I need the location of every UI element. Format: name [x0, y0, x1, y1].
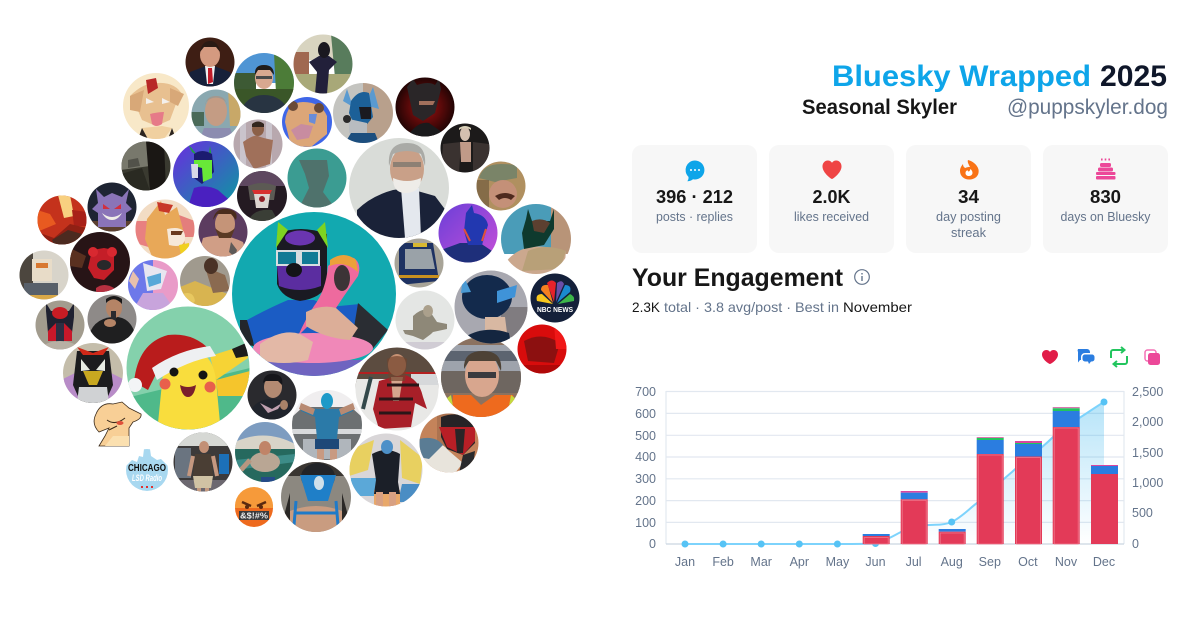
month labels: Sep: [979, 555, 1001, 569]
avatar: man in leather jacket with phone: [87, 294, 137, 344]
month labels: Mar: [750, 555, 772, 569]
left axis labels: [635, 385, 656, 551]
avatar: bearded shirtless man: [198, 207, 248, 257]
avatar: older man in dark suit: [349, 138, 449, 238]
avatar: woman in fur coat: [440, 123, 490, 173]
heading: Your Engagement: Your Engagement: [632, 264, 844, 292]
avatar: man at street fair: [173, 432, 233, 492]
chart legend: [1042, 347, 1160, 367]
avatar: angry swearing emoji: &$!#%: [240, 510, 268, 520]
avatar: Chicago LSD Radio logo: [126, 449, 168, 491]
engagement summary: November: [843, 299, 912, 315]
avatar: blue transit bus: [394, 238, 444, 288]
title: Bluesky Wrapped: [832, 60, 1091, 93]
avatar: red blurred abstract: [517, 324, 567, 374]
engagement summary: 2.3K: [632, 299, 661, 315]
stat label: likes received: [794, 210, 869, 224]
line data points: [682, 398, 1108, 548]
handle: @puppskyler.dog: [1007, 96, 1168, 119]
avatar: penguin-like furry suit: [63, 343, 123, 403]
avatar: white fox mask on pink and purple: [128, 260, 178, 310]
avatar: red and black pup hood: [35, 300, 85, 350]
left axis labels: 200: [635, 494, 656, 508]
avatar: man in suit with red tie: [185, 37, 235, 87]
avatar: cartoon bloody dog: [123, 73, 189, 139]
left axis labels: 500: [635, 429, 656, 443]
month labels: Aug: [941, 555, 963, 569]
panel: posts and replies: [632, 145, 757, 253]
bar: July: [901, 491, 928, 544]
avatar: black mask on red: [395, 77, 455, 137]
avatar: monkey on white: [395, 290, 455, 350]
left axis labels: 100: [635, 516, 656, 530]
engagement summary: total · 3.8 avg/post · Best in: [664, 299, 839, 315]
avatar: gray pup with red mask at festival: [237, 171, 287, 221]
avatar: NBC News logo: NBC NEWS: [537, 307, 573, 314]
icon: flame: [960, 160, 979, 180]
icon: birthday cake: [1096, 158, 1116, 180]
avatar: man with inflatable: [180, 256, 230, 306]
icon: quotes legend: [1145, 350, 1160, 365]
avatar: neon green and blue pup: [173, 141, 239, 207]
avatar: man with gray hair: [191, 89, 241, 139]
chart: monthly engagement: [635, 385, 1163, 569]
right axis labels: 2,000: [1132, 415, 1163, 429]
avatar: blue and black fursuit: [333, 83, 393, 143]
right axis labels: 0: [1132, 537, 1139, 551]
month labels: Jan: [675, 555, 695, 569]
cumulative area: [685, 402, 1104, 544]
avatar: angry swearing emoji: [235, 487, 273, 527]
avatar: Chicago LSD Radio logo: CHICAGO: [128, 463, 166, 474]
panel: days on Bluesky: [1043, 145, 1168, 253]
avatar: man with glasses by train: [441, 337, 521, 417]
bar: August: [939, 529, 966, 544]
avatar: blue rubber pup mask: [454, 270, 528, 344]
avatar: swimmer in lake: [235, 422, 295, 482]
avatar: cartoon tan dog doodle: [94, 402, 141, 446]
icon: replies legend: [1078, 349, 1094, 364]
bar: December: [1091, 465, 1118, 544]
avatar: man against colorful mural: [349, 433, 423, 507]
avatar: dark figure statue in garden: [293, 34, 353, 94]
right axis labels: 1,500: [1132, 446, 1163, 460]
month labels: Feb: [712, 555, 734, 569]
avatar: Chicago LSD Radio logo: LSD Radio: [132, 473, 162, 483]
avatar: blurred teal figure: [287, 148, 347, 208]
icon: info: [855, 270, 869, 284]
grid lines and axes: [666, 391, 1124, 544]
stat label: streak: [951, 226, 987, 240]
avatar: plaid robe skier: [355, 347, 439, 431]
left axis labels: 300: [635, 472, 656, 486]
avatar: Pikachu with santa hat: [126, 306, 250, 430]
bar: October: [1015, 441, 1042, 544]
stat label: posts · replies: [656, 210, 733, 224]
avatar: fiery red orange abstract: [37, 195, 87, 245]
right axis labels: 2,500: [1132, 385, 1163, 399]
panel: day posting streak: [906, 145, 1031, 253]
month labels: Jun: [865, 555, 886, 569]
month labels: Jul: [906, 555, 922, 569]
avatar: red leather mask and shark plush: [419, 413, 479, 473]
avatar: blue pup hood with harness: [281, 462, 351, 532]
icon: heart: [822, 160, 842, 179]
stat label: day posting: [936, 210, 1001, 224]
avatar: dark tunnel scene: [121, 141, 171, 191]
avatar: blue singlet figure on balcony: [292, 390, 362, 460]
right axis labels: [1132, 385, 1163, 551]
bar: September: [977, 437, 1004, 544]
avatar: smiling man with glasses outdoors: [234, 53, 294, 113]
avatar: cartoon lion bear: [282, 97, 332, 147]
avatar: Gengar: [87, 182, 137, 232]
icon: reposts legend: [1111, 347, 1127, 367]
month labels: [675, 555, 1115, 569]
left axis labels: 600: [635, 407, 656, 421]
stat value: 396 · 212: [656, 187, 733, 207]
icon: likes legend: [1042, 350, 1058, 364]
avatar: man crouching: [233, 119, 283, 169]
icon: chat bubble: [686, 160, 704, 181]
stat label: [936, 210, 1001, 240]
right axis labels: 500: [1132, 506, 1153, 520]
month labels: May: [826, 555, 850, 569]
stat value: 34: [958, 187, 979, 207]
avatar: NBC News logo: [530, 273, 580, 323]
avatar: pup in flamingo pool float: [232, 212, 396, 376]
title: 2025: [1100, 60, 1167, 93]
avatar: red pup mask dark background: [70, 232, 130, 292]
right axis labels: 1,000: [1132, 476, 1163, 490]
left axis labels: 700: [635, 385, 656, 399]
left axis labels: 400: [635, 450, 656, 464]
engagement summary: [632, 299, 912, 315]
stat value: 830: [1090, 187, 1121, 207]
month labels: Nov: [1055, 555, 1078, 569]
month labels: Dec: [1093, 555, 1115, 569]
display name: Seasonal Skyler: [802, 96, 957, 119]
avatar: cluttered collage: [19, 250, 69, 300]
cumulative line: [685, 402, 1104, 544]
avatar cluster: [19, 34, 580, 532]
stat label: days on Bluesky: [1060, 210, 1151, 224]
avatar: blue pup with purple lights: [438, 203, 498, 263]
month labels: Apr: [790, 555, 809, 569]
month labels: Oct: [1018, 555, 1038, 569]
panel: likes received: [769, 145, 894, 253]
left axis labels: 0: [649, 537, 656, 551]
bar: November: [1053, 407, 1080, 544]
avatar: green pup hood in bed: [501, 204, 571, 274]
avatar: young man in dark gear: [247, 370, 297, 420]
bar: June: [863, 534, 890, 544]
avatar: orange fox cartoon: [135, 199, 195, 259]
stat value: 2.0K: [812, 187, 850, 207]
avatar: man in green cap with mustache: [476, 161, 526, 211]
